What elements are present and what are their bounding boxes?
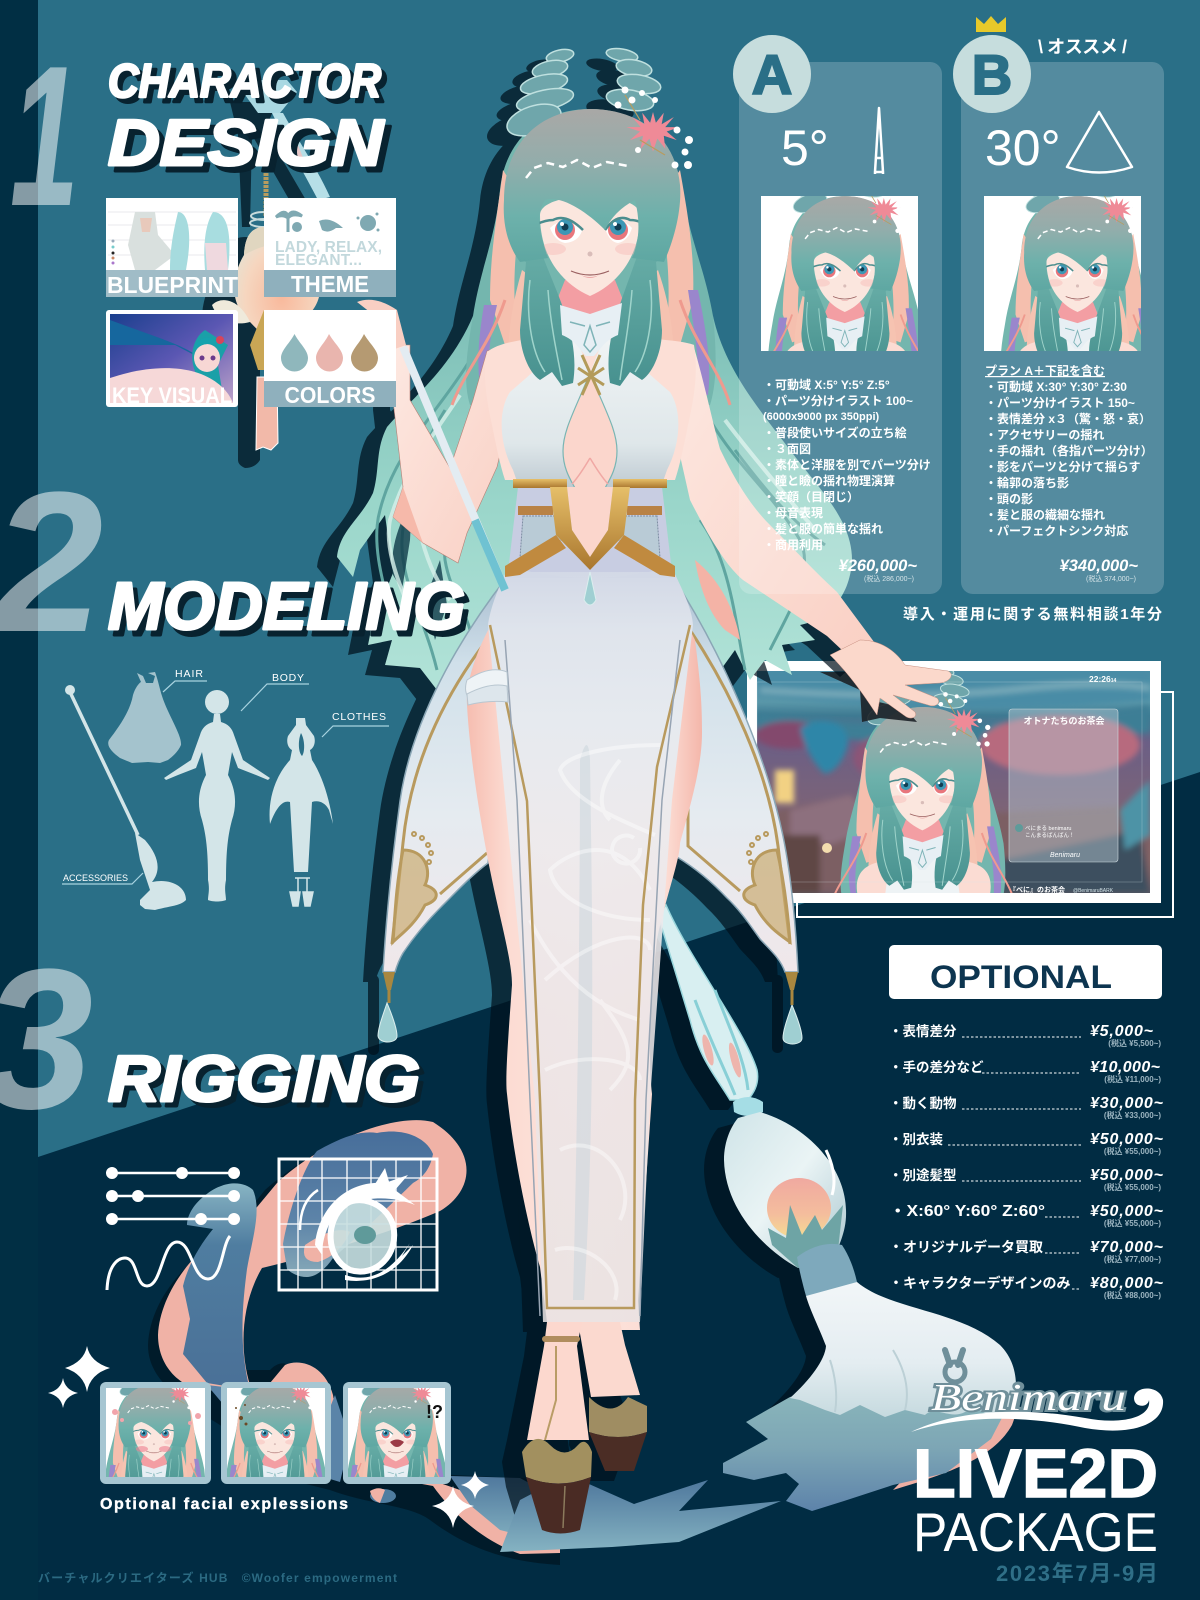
arm right with hand [672, 344, 951, 718]
arm left with staff [357, 300, 513, 590]
optional price list: ¥80,000~ [1090, 1275, 1164, 1292]
silhouette: accessories [62, 685, 186, 910]
silhouette: clothes: CLOTHES [332, 711, 386, 723]
panel: plan B: ・輪郭の落ち影 [985, 475, 1069, 490]
sliders icon [106, 1168, 240, 1224]
free consultation note: 導入・運用に関する無料相談1年分 [903, 605, 1162, 623]
panel: plan A: ・笑顔（目閉じ） [763, 489, 859, 504]
optional price list: (税込 ¥55,000~) [1104, 1146, 1161, 1156]
panel: plan B: (税込 374,000~) [1086, 574, 1136, 583]
optional price list: ¥50,000~ [1090, 1131, 1164, 1148]
card: colors: COLORS [284, 382, 376, 408]
panel: plan B: ・手の揺れ（各指パーツ分け） [985, 443, 1153, 458]
panel: plan A: (6000x9000 px 350ppi) [763, 411, 880, 423]
heading: character design: CHARACTOR [108, 54, 381, 107]
eye mesh grid [279, 1159, 437, 1290]
title: LIVE2D PACKAGE: PACKAGE [913, 1501, 1158, 1563]
optional price list: (税込 ¥33,000~) [1104, 1110, 1161, 1120]
card: theme: LADY, RELAX, [275, 239, 382, 256]
heading: modeling: MODELING [108, 569, 465, 644]
card: theme: THEME [291, 271, 369, 297]
panel: plan A: ・３面図 [763, 442, 811, 456]
brush staff, bulb and ink brush [500, 905, 1018, 1552]
thumbnail: surprised face: !? [426, 1402, 443, 1422]
card: blueprint [106, 198, 238, 298]
silhouette: clothes [270, 711, 389, 906]
legs [467, 610, 702, 1330]
monitor preview: オトナたちのお茶会 [1023, 715, 1105, 726]
wave curve icon [107, 1236, 230, 1290]
optional price list: ・キャラクターデザインのみ [889, 1275, 1070, 1291]
panel: plan B: B [972, 43, 1012, 106]
optional price list: (税込 ¥11,000~) [1104, 1074, 1161, 1084]
logo: Benimaru [911, 1350, 1163, 1432]
optional price list: ・動く動物 [889, 1095, 957, 1111]
panel: plan A: ¥260,000~ [839, 557, 917, 575]
heading: character design: CHARACTOR [113, 59, 386, 112]
shoes [522, 1322, 647, 1534]
skirt panel right [660, 577, 802, 1044]
heading: character design: DESIGN [108, 106, 385, 179]
optional heading [889, 945, 1162, 999]
panel: plan B: ・可動域 X:30° Y:30° Z:30 [985, 379, 1127, 394]
belt [505, 479, 675, 605]
panel: plan A: ・母音表現 [763, 505, 823, 520]
optional price list: ・別途髪型 [889, 1167, 956, 1183]
thumbnail: blush face [100, 1382, 211, 1484]
panel: plan A: A [752, 43, 792, 106]
monitor preview: Benimaru [1050, 852, 1080, 859]
optional price list: (税込 ¥55,000~) [1104, 1218, 1161, 1228]
optional price list: ¥30,000~ [1090, 1095, 1164, 1112]
heading: rigging: RIGGING [108, 1042, 420, 1115]
card: blueprint: BLUEPRINT [107, 272, 238, 298]
panel: plan A: ・素体と洋服を別でパーツ分け [763, 457, 931, 472]
logo: Benimaru: Benimaru [930, 1377, 1126, 1419]
date: 2023年7月-9月 [996, 1561, 1158, 1586]
panel: plan B: ・表情差分 x３（驚・怒・哀） [985, 411, 1151, 426]
monitor preview: こんまるばんばん！ [1025, 831, 1075, 839]
optional price list: ¥10,000~ [1090, 1059, 1161, 1076]
optional price list: ・手の差分など [889, 1059, 984, 1075]
optional price list: ¥5,000~ [1090, 1023, 1154, 1040]
card: theme [264, 198, 396, 297]
panel: plan A: 5° [781, 120, 829, 176]
panel: plan B [953, 35, 1164, 594]
card: key visual: KEY VISUAL [112, 383, 232, 408]
hair: face and head front [503, 46, 693, 386]
thumbnail: angry face [221, 1382, 331, 1484]
dress skirt [466, 570, 693, 1322]
monitor preview: @BenimaruBARK [1073, 888, 1114, 894]
panel: plan B: ・パーツ分けイラスト 150~ [985, 396, 1135, 410]
optional heading: OPTIONAL [930, 959, 1112, 995]
panel: plan B: ・髪と服の繊細な揺れ [985, 507, 1105, 522]
skirt panel left [378, 577, 520, 1042]
optional price list: (税込 ¥88,000~) [1104, 1290, 1161, 1300]
lacing [578, 355, 604, 395]
optional price list: ・X:60° Y:60° Z:60° [889, 1203, 1045, 1220]
monitor preview: 『べに』のお茶会 [1009, 885, 1065, 894]
hair: head back [452, 109, 730, 405]
silhouette: hair: HAIR [175, 668, 203, 680]
panel: plan B: ¥340,000~ [1060, 557, 1138, 575]
long hair [337, 316, 852, 690]
silhouette: hair [108, 668, 207, 763]
torso [485, 330, 696, 490]
panel: plan B: ・影をパーツと分けて揺らす [985, 460, 1141, 474]
panel: plan A: ・髪と服の簡単な揺れ [763, 521, 883, 536]
card: key visual [106, 310, 238, 408]
optional price list: ・オリジナルデータ買取 [889, 1239, 1043, 1255]
heading: character design [108, 54, 391, 185]
icon: crown [976, 16, 1006, 32]
heading: modeling: MODELING [113, 575, 470, 650]
credit footer: バーチャルクリエイターズ HUB ©Woofer empowerment [38, 1570, 397, 1585]
panel: plan A: ・瞳と瞼の揺れ物理演算 [763, 473, 895, 488]
monitor preview: べにまる benimaru [1025, 825, 1071, 832]
recommended label: \ オススメ / [1038, 37, 1127, 57]
thumbnail: surprised face [343, 1382, 451, 1484]
panel: plan A: ・商用利用 [763, 537, 823, 552]
panel: plan A [733, 35, 942, 594]
panel: plan B: プラン A＋下記を含む [985, 363, 1105, 378]
heading: character design: DESIGN [114, 112, 391, 185]
optional price list: ¥70,000~ [1090, 1239, 1164, 1256]
panel: plan B: ・アクセサリーの揺れ [985, 428, 1104, 442]
ink swoosh [148, 1120, 560, 1565]
title: LIVE2D PACKAGE: LIVE2D [913, 1435, 1158, 1512]
silhouette: body: BODY [272, 672, 304, 684]
numeral 1: 1 [10, 25, 79, 248]
ornament: lantern staff top [212, 80, 330, 450]
optional price list: (税込 ¥5,500~) [1108, 1038, 1161, 1048]
optional price list: ・表情差分 [889, 1023, 957, 1039]
panel: plan A: ・可動域 X:5° Y:5° Z:5° [763, 377, 890, 392]
optional price list: ¥50,000~ [1090, 1167, 1164, 1184]
title: LIVE2D PACKAGE [913, 1435, 1158, 1563]
silhouette: accessories: ACCESSORIES [63, 873, 128, 883]
caption: facial expressions: Optional facial explessions [100, 1496, 348, 1513]
optional price list: (税込 ¥77,000~) [1104, 1254, 1161, 1264]
sparkles upper [48, 1346, 110, 1408]
monitor preview [747, 661, 1173, 917]
panel: plan B: ・頭の影 [985, 492, 1033, 506]
panel: plan A: ・パーツ分けイラスト 100~ [763, 394, 913, 408]
panel: plan B: 30° [985, 120, 1061, 176]
panel: plan B: ・パーフェクトシンク対応 [985, 523, 1128, 538]
optional price list: ・別衣装 [889, 1131, 943, 1147]
optional price list [889, 1023, 1164, 1300]
silhouette: body [164, 672, 309, 902]
logo: Benimaru: Benimaru [931, 1377, 1126, 1419]
panel: plan A: (税込 286,000~) [864, 574, 914, 583]
character drop shadow [202, 56, 996, 1540]
panel: plan A: ・普段使いサイズの立ち絵 [763, 425, 907, 440]
monitor preview: 22:2614 [1089, 674, 1117, 684]
sparkles lower [432, 1471, 489, 1528]
card: colors [264, 310, 396, 408]
optional price list: (税込 ¥55,000~) [1104, 1182, 1161, 1192]
heading: rigging: RIGGING [113, 1047, 425, 1120]
optional price list: ¥50,000~ [1090, 1203, 1164, 1220]
card: theme: ELEGANT... [275, 252, 362, 269]
